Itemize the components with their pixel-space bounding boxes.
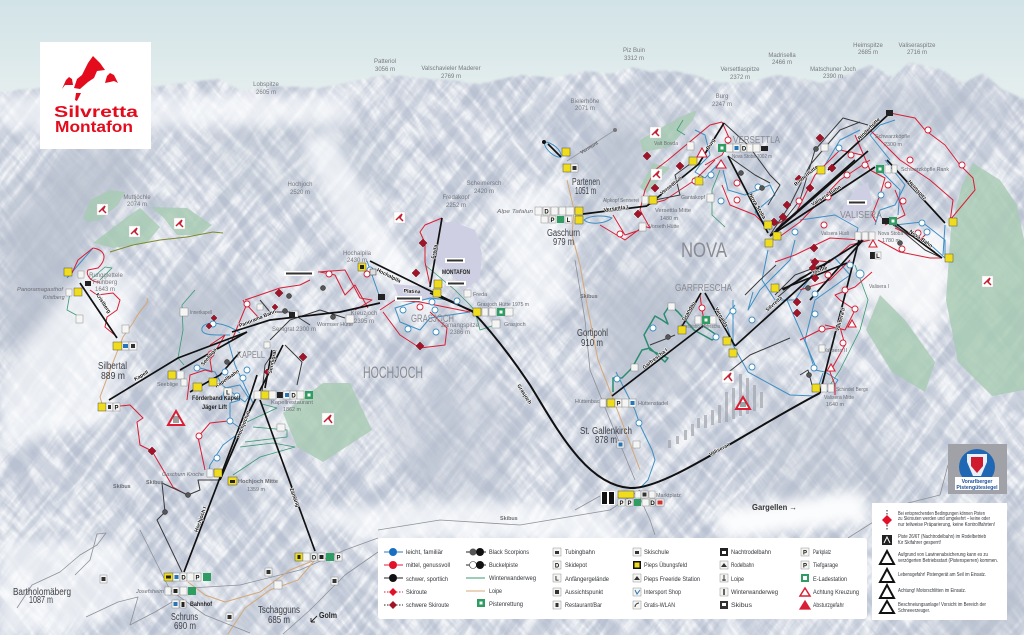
town and destination labels: Schruns (171, 612, 198, 623)
peak name labels: 2071 m (575, 106, 595, 112)
legend: services column 2: Gratis-WLAN (644, 602, 675, 609)
icons: Hochjoch Mitte (207, 424, 285, 485)
lift name labels: Förderband Kapell (192, 396, 240, 402)
red pistes (72, 113, 975, 495)
legend: services column 2: Pieps Freeride Station (644, 576, 700, 583)
town and destination labels: Wormser Hütte (317, 322, 353, 328)
legend: difficulty lines: mittel, genussvoll (406, 562, 450, 569)
peak name labels: 2252 m (446, 203, 466, 209)
legend panel (378, 538, 867, 619)
ski area names: KAPELL (237, 350, 265, 361)
peak name labels: 2430 m (347, 258, 367, 264)
icons: St. Gallenkirch base (601, 441, 664, 507)
ski area names (237, 134, 882, 382)
lift name labels: Rinderhütte (793, 165, 820, 188)
valley roads (17, 260, 948, 634)
town and destination labels: Alpenbistro Garfrescha (680, 324, 720, 330)
town and destination labels: Hochjoch Mitte (238, 479, 278, 485)
legend: special runs: Black Scorpions (489, 549, 530, 556)
town and destination labels: 889 m (101, 371, 125, 382)
town and destination labels: Grasjoch Hütte 1975 m (477, 302, 529, 308)
logo mountain mark (62, 56, 118, 101)
town and destination labels: Seeblige (157, 382, 178, 388)
lift name labels (94, 117, 933, 533)
lift name labels: Grasjoch (515, 383, 532, 406)
piste number markers (148, 127, 965, 514)
legend: difficulty lines (384, 548, 450, 609)
lift name labels: Freda (431, 244, 439, 259)
peak name labels: 3312 m (624, 56, 644, 62)
peak name labels: Piz Buin (623, 48, 645, 54)
blue pistes (67, 120, 945, 488)
icons: Nova valley stations: P (616, 402, 621, 408)
lift name labels: Platina (403, 289, 421, 295)
town and destination labels: Alpkopf Sennerei (603, 198, 639, 204)
peak name labels: Versettlaspitze (720, 67, 760, 73)
lift name labels: Jäger Lift (202, 405, 227, 411)
town and destination labels: Kristberg (43, 295, 65, 301)
peak name labels: 2390 m (823, 74, 843, 80)
town and destination labels: 1087 m (29, 595, 53, 606)
legend: special runs (466, 548, 536, 608)
icons: Versettla (639, 142, 768, 231)
peak name labels: Senigrat 2300 m (272, 327, 316, 333)
ski area names: NOVA (681, 239, 727, 262)
peak name labels: 2716 m (907, 50, 927, 56)
Pistengütesiegel badge: Vorarlberger (962, 479, 992, 485)
legend: services column 1: L (555, 576, 559, 582)
lift name labels: Seebliga (200, 347, 218, 367)
legend: services column 2: Skischule (644, 549, 669, 556)
lift name labels: Versettla II (659, 176, 684, 197)
note texts: nur teilweise Präparierung, keine Kontrollfahrten! (898, 522, 995, 528)
note texts: für Skifahrer gesperrt! (898, 540, 941, 546)
lift name labels: Nova Stoba (747, 193, 767, 220)
town and destination labels: Silbertal (98, 361, 127, 372)
peak name labels: 2520 m (290, 190, 310, 196)
town and destination labels: Freda (473, 292, 487, 298)
lift name labels: Kristberg (94, 292, 112, 315)
Pistengütesiegel badge: Pistengütesiegel (956, 485, 998, 491)
note texts: Lebensgefahr! Pistengerät am Seil im Einsatz. (898, 572, 986, 578)
lift name labels: Valisera Bahn (811, 184, 842, 208)
icons: Kristberg top (64, 268, 188, 333)
town and destination labels: Vorseth Hütte (649, 224, 679, 230)
town and destination labels: Gortipohl (577, 328, 608, 339)
town and destination labels: 910 m (581, 338, 603, 349)
town and destination labels: 1640 m (826, 402, 844, 408)
town and destination labels: Valisera II (823, 348, 847, 354)
town and destination labels: Golm (319, 610, 337, 620)
dark red ski route diamonds (148, 134, 836, 455)
legend: services column 1: Skidepot (565, 562, 587, 569)
town and destination labels: Versettla Mitte (655, 208, 691, 214)
icons: Grasjoch and Hochalpila (257, 263, 513, 328)
logo panel: Montafon (55, 119, 133, 136)
note texts (898, 511, 998, 614)
freeride skier icons (97, 127, 993, 425)
legend: services column 4 (800, 548, 859, 609)
cross-country ski trails (100, 180, 640, 634)
legend: services column 3: Winterwanderweg (731, 589, 778, 596)
icons: Gaschurn and Partenen: P (550, 218, 555, 224)
icons: skibus stops (100, 568, 338, 621)
peak name labels: Valschavieler Maderer (421, 66, 481, 72)
cable car lifts (80, 113, 945, 572)
town and destination labels: Nova Stoba 2002 m (732, 154, 772, 160)
note texts: verzögerten Betriebsstart (Pistensperren) kommen. (898, 558, 998, 564)
town and destination labels: 690 m (174, 621, 196, 632)
peak name labels: Heimspitze (853, 43, 883, 49)
town and destination labels: 979 m (553, 237, 574, 248)
legend: services column 4: Parkplatz (813, 549, 831, 556)
icons: Gaschurn and Partenen: L (567, 218, 571, 224)
town and destination labels: Gaschurn (547, 228, 580, 239)
logo panel (40, 42, 151, 149)
peak name labels: 2769 m (441, 74, 461, 80)
town and destination labels: Valisera I (869, 284, 889, 290)
icons: Kristberg valley: P (114, 406, 119, 412)
town and destination labels: Schwarzköpfle Rank (901, 167, 949, 173)
peak name labels: Zamangspitze (441, 323, 480, 329)
icons: Schruns stations: P (195, 576, 200, 582)
town and destination labels: Innerkapell (190, 310, 212, 316)
town and destination labels: Kapellrestaurant (271, 400, 314, 406)
icons: St. Gallenkirch base: P (619, 501, 624, 507)
peak name labels: Burg (716, 94, 728, 100)
lift name labels: Grandau (681, 301, 697, 322)
town and destination labels: St. Gallenkirch (580, 426, 632, 437)
legend: difficulty lines: schwere Skiroute (406, 602, 449, 609)
town and destination labels: Hüttenstadel (638, 401, 668, 407)
legend: services column 2: Pieps Übungsfeld (644, 561, 687, 569)
legend: difficulty lines: Skiroute (406, 589, 427, 596)
town and destination labels: Marktplatz (656, 493, 681, 499)
avalanche warning triangles (168, 148, 877, 425)
town and destination labels: 1051 m (575, 186, 596, 197)
peak name labels: 2372 m (730, 75, 750, 81)
lift name labels: Sennigrat (268, 349, 278, 374)
town and destination labels: Gargellen → (752, 503, 797, 512)
icons: St. Gallenkirch base: D (650, 501, 655, 507)
legend: services column 3 (720, 548, 778, 609)
legend: special runs: Loipe (489, 588, 502, 595)
town and destination labels: Valt Bovda (654, 141, 678, 147)
red markers (196, 127, 965, 439)
legend: services column 3: Skibus (731, 602, 753, 609)
legend: services column 2: Intersport Shop (644, 589, 681, 596)
peak name labels: Muttjöchle (123, 195, 151, 201)
peak name labels: Madrisella (768, 53, 796, 59)
icons: Kristberg valley (98, 342, 137, 412)
legend: services column 4: P (803, 564, 807, 570)
peak name labels: Kreuzjoch (351, 311, 377, 317)
legend: difficulty lines: leicht, familiär (406, 549, 444, 556)
town and destination labels: Bartholomäberg (13, 587, 71, 598)
town and destination labels: 2300 m (884, 142, 902, 148)
peak name labels: Lobspitze (253, 82, 280, 88)
note texts: zu Skirouten werden und umgekehrt – keine oder (898, 516, 990, 522)
peak name labels: 2386 m (450, 330, 470, 336)
lift name labels: Panorama Bahn (238, 309, 277, 329)
icons: Nova valley stations (600, 284, 834, 408)
small event labels on map: MONTAFON (442, 270, 470, 276)
legend: services column 1: Aussichtspunkt (565, 589, 603, 596)
icons: Schruns stations (164, 573, 211, 608)
icons: Kapell stations (168, 311, 313, 400)
legend: services column 1: Anfängergelände (565, 576, 609, 583)
note texts: Piste 26/6T (Nachtrodelbahn) im Rodelbetrieb (898, 534, 986, 540)
winter hiking trails (67, 120, 868, 475)
icons: Gaschurn and Partenen (535, 148, 583, 224)
icons: Valisera (764, 110, 957, 262)
town and destination labels: Bahnhof (190, 602, 213, 608)
town and destination labels: Schwarzköpfle (875, 134, 910, 140)
town and destination labels: Grasjoch (504, 322, 526, 328)
peak name labels: 2247 m (712, 102, 732, 108)
thick green tubing trail Garfrescha (613, 305, 718, 392)
lift name labels: Hochalpila (375, 267, 402, 285)
icons: Versettla: D (742, 146, 747, 152)
peak name labels: 1643 m (95, 287, 115, 293)
legend: services column 3: Loipe (731, 576, 744, 583)
town and destination labels: Gantakopf (681, 195, 705, 201)
blue markers (194, 145, 930, 461)
town and destination labels: Schindel Bergs (836, 387, 868, 393)
lift name labels: Jöchle (811, 265, 828, 277)
legend: services column 2 (633, 548, 700, 609)
lift name labels: Garfrescha I (642, 347, 670, 371)
lift name labels: Silvretta (765, 295, 784, 313)
legend: services column 1: Restaurant/Bar (565, 602, 603, 609)
legend: special runs: Winterwanderweg (489, 575, 536, 582)
peak name labels: Valiseraspitze (899, 43, 936, 49)
icons: Kapell stations: L (226, 390, 230, 396)
legend: services column 3: Nachtrodelbahn (731, 549, 771, 556)
lift name labels: Zamang (288, 487, 300, 508)
icons: Tschagguns station: P (336, 556, 341, 562)
lift name labels: Hochjoch I (194, 506, 209, 533)
legend: services column 1: D (555, 564, 560, 570)
icons: Tschagguns station (295, 553, 342, 562)
legend: services column 4: Absturzgefahr (813, 602, 845, 609)
peak name labels: 3056 m (375, 67, 395, 73)
peak name labels: 2420 m (474, 189, 494, 195)
peak name labels: Hochjoch (287, 182, 313, 188)
legend: special runs: Buckelpiste (489, 562, 518, 569)
note icons (880, 510, 894, 613)
town and destination labels: Tschagguns (258, 605, 300, 616)
ski area names: GRASJOCH (411, 313, 454, 325)
town and destination labels: Skibus (113, 484, 131, 490)
icons: Gaschurn and Partenen: D (544, 210, 549, 216)
peak name labels: Fredakopf (442, 195, 470, 201)
icons: Kapell stations: D (291, 394, 296, 400)
lift name labels: Nova Bahn (908, 229, 933, 249)
lift name labels: Hochjoch II (236, 410, 252, 439)
logo panel: Silvretta (54, 104, 138, 121)
peak name labels: Patteriol (374, 59, 396, 65)
legend: difficulty lines: schwer, sportlich (406, 576, 448, 583)
icons: St. Gallenkirch base: P (627, 501, 632, 507)
peak name labels: Matschuner Joch (810, 67, 856, 73)
town and destination labels: Valisera Mitte (824, 395, 854, 401)
black pistes (157, 118, 942, 572)
note texts: Bei entsprechenden Bedingungen können Pisten (898, 511, 985, 517)
note texts: Beschneiungsanlage! Vorsicht im Bereich der (898, 602, 986, 608)
forest and freeride zones (83, 110, 1024, 462)
legend: services column 3: Rodelbahn (731, 562, 754, 569)
town and destination labels: 1359 m (247, 487, 265, 493)
ski area names: VERSETTLA (733, 134, 780, 146)
note texts: Aufgrund von Lawinenabsicherung kann es zu (898, 552, 988, 558)
town and destination labels: Panoramagasthof (17, 287, 64, 293)
town and destination labels: Skibus (500, 516, 518, 522)
lift name labels: Versettla I (603, 204, 629, 213)
peak name labels: Rungglettele (89, 273, 124, 279)
peak name labels: Hochalpila (343, 251, 372, 257)
lift name labels: Kapell (133, 369, 150, 383)
legend: services column 4: E-Ladestation (813, 576, 847, 583)
legend: services column 1 (553, 548, 609, 609)
peak name labels: 2395 m (354, 319, 374, 325)
town and destination labels: 1780 m (882, 238, 900, 244)
legend: services column 4: P (803, 550, 807, 556)
lift name labels: Heimspitz (906, 179, 927, 202)
lift name labels: Vermunt (579, 140, 600, 156)
lift name labels: Kapellbahn (214, 369, 241, 390)
legend: services column 4: Tiefgarage (813, 562, 838, 569)
ski area names: HOCHJOCH (363, 363, 423, 382)
small event labels on map (284, 200, 867, 301)
icons: Tschagguns station: D (312, 556, 317, 562)
lift name labels: Rinderhütte (857, 117, 882, 142)
town and destination labels: Gaschurn Kroche (162, 472, 204, 478)
lift name labels: Vergalda (713, 307, 729, 328)
legend: services column 1: Tubingbahn (565, 549, 595, 556)
avalanche protection hatching (668, 374, 763, 448)
Pistengütesiegel badge (948, 444, 1007, 494)
peak name labels: Bielerhöhe (571, 99, 600, 105)
town and destination labels (13, 134, 949, 632)
town and destination labels: 1862 m (283, 407, 301, 413)
note texts: Achtung! Motorschlitten im Einsatz. (898, 588, 966, 594)
icons: Schruns stations: D (181, 576, 186, 582)
station service icons (64, 110, 957, 621)
town and destination labels: Skibus (580, 294, 598, 300)
grey buckel piste markers (162, 146, 902, 514)
town and destination labels: 685 m (268, 615, 290, 626)
lift name labels: Burg (705, 138, 717, 151)
peak name labels: 2605 m (256, 90, 276, 96)
note texts: Schneeerzeuger. (898, 608, 930, 614)
town and destination labels: Nova Stoba (878, 231, 903, 237)
town and destination labels: Valisera Hüsli (821, 231, 849, 237)
town and destination labels: 1480 m (660, 216, 678, 222)
town and destination labels: Skibus (146, 480, 164, 486)
town and destination labels: Partenen (572, 177, 600, 188)
ski area names: GARFRESCHA (675, 283, 732, 294)
sky with jagged horizon (0, 0, 1024, 104)
town and destination labels: 878 m (595, 435, 617, 446)
ski area names: VALISERA (840, 209, 882, 221)
legend: special runs: Pistenrettung (489, 601, 523, 608)
lavender freeride area Grasjoch (393, 182, 872, 300)
lift name labels: Valisera II (835, 307, 847, 332)
lift name labels: Valisera I (708, 442, 731, 458)
peak name labels: 2074 m (127, 202, 147, 208)
icons: Valisera: L (876, 254, 880, 260)
town and destination labels: Hüttenbach (575, 399, 603, 405)
peak name labels: Fruhberg (93, 280, 117, 286)
warning notes panel (872, 503, 1007, 620)
town and destination labels: Josefsheim (135, 589, 165, 595)
town and destination labels: Alpe Tafalun (496, 209, 533, 215)
legend: services column 4: Achtung Kreuzung (813, 589, 859, 596)
peak name labels: 2466 m (772, 60, 792, 66)
peak name labels: 2685 m (858, 50, 878, 56)
peak name labels (89, 43, 936, 336)
peak name labels: Scheimersch (467, 181, 501, 187)
